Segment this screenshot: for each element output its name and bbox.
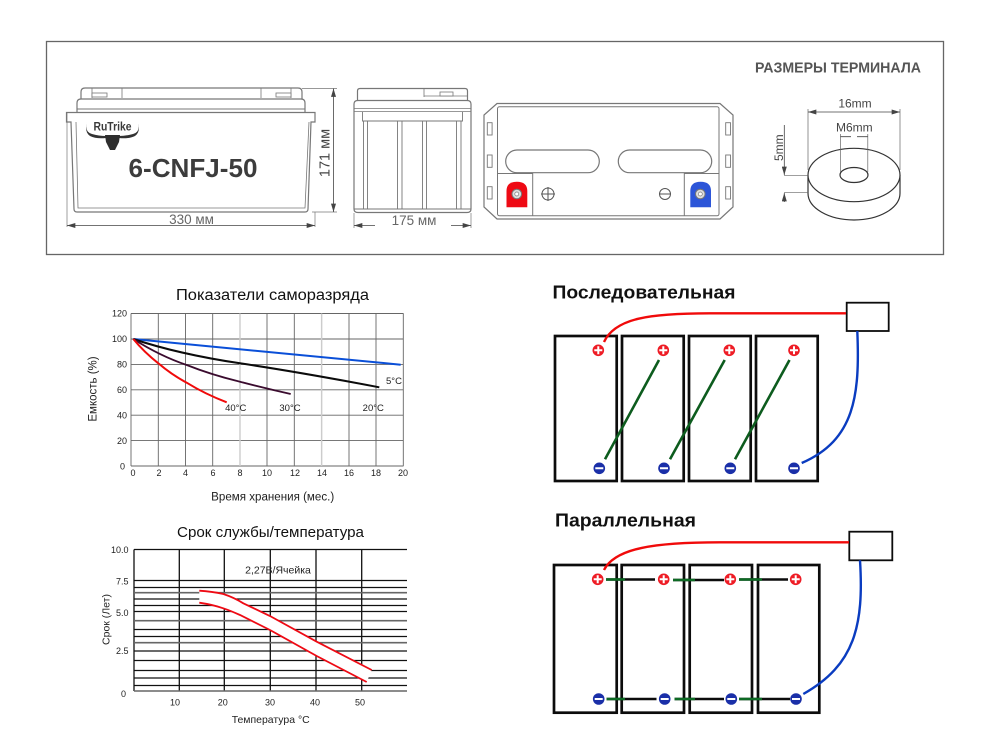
y axis ticks: 10.0: [111, 545, 128, 555]
x axis ticks: [170, 698, 365, 708]
terminal washer diagram: [772, 96, 900, 220]
x axis ticks: 12: [290, 468, 300, 478]
diagram: parallel connection: [554, 532, 892, 713]
heading: parallel connection: Параллельная: [555, 510, 696, 530]
y axis ticks: 20: [117, 436, 127, 446]
y axis ticks: 120: [112, 308, 127, 318]
curve: 40°C: [133, 339, 227, 402]
x axis ticks: 4: [183, 468, 188, 478]
blue wire: [802, 331, 858, 463]
curve labels: 5°C: [386, 376, 402, 387]
positive terminals: [592, 344, 800, 356]
curve labels: 20°C: [363, 403, 384, 414]
y axis ticks: 40: [117, 410, 127, 420]
label: M6mm: M6mm: [836, 120, 873, 134]
curve: 5°C: [133, 339, 401, 365]
y axis ticks: [111, 545, 128, 699]
plus symbol: [541, 187, 555, 201]
red wire: [604, 313, 846, 342]
171 mm dimension: [302, 88, 337, 212]
blue wire: [803, 560, 861, 694]
y axis ticks: 60: [117, 385, 127, 395]
y axis label: Срок (Лет): [100, 594, 112, 645]
minus symbol: [660, 188, 670, 200]
y axis ticks: 5.0: [116, 608, 128, 618]
jumper wires: [605, 360, 790, 459]
x axis ticks: 50: [355, 698, 365, 708]
x axis ticks: 16: [344, 468, 354, 478]
175 mm dimension: 175 мм: [392, 213, 436, 228]
title: self-discharge: Показатели саморазряда: [176, 287, 369, 304]
y axis ticks: [112, 308, 127, 472]
x axis ticks: 30: [265, 698, 275, 708]
curve note: 2,27В/Ячейка: [245, 564, 311, 576]
x axis ticks: 14: [317, 468, 327, 478]
chart: service life vs temperature: [100, 545, 407, 726]
x axis ticks: 10: [262, 468, 272, 478]
x axis ticks: 20: [398, 468, 408, 478]
logo: RuTrike bull: RuTrike: [94, 120, 132, 134]
y axis ticks: 0: [121, 689, 126, 699]
x axis ticks: 6: [210, 468, 216, 478]
x axis ticks: 18: [371, 468, 381, 478]
x axis ticks: 20: [218, 698, 228, 708]
charger box: [849, 532, 892, 560]
x axis ticks: 2: [156, 468, 162, 478]
y axis ticks: 0: [120, 462, 125, 472]
upper curve: [199, 591, 372, 670]
red wire: [604, 542, 849, 570]
front view of battery: [66, 88, 337, 227]
curve labels: [225, 376, 402, 414]
title: service life: Срок службы/температура: [177, 524, 365, 541]
x axis ticks: 8: [237, 468, 243, 478]
curve: 20°C: [133, 339, 379, 387]
positive terminals: [592, 574, 802, 585]
curve labels: 30°C: [279, 403, 301, 414]
logo: RuTrike bull: [86, 120, 139, 150]
chart: self-discharge: [88, 308, 408, 504]
y axis ticks: 80: [117, 360, 127, 370]
charger box: [847, 303, 889, 331]
battery cells: [554, 565, 819, 713]
battery cells: [555, 336, 818, 481]
x axis label: Температура °C: [232, 714, 310, 726]
top jumper wires: [606, 578, 788, 581]
white band between curves: [199, 591, 372, 682]
label: 16mm: 16mm: [838, 96, 872, 110]
heading: terminal dimensions: РАЗМЕРЫ ТЕРМИНАЛА: [755, 60, 922, 76]
negative terminal: [690, 182, 711, 207]
lower curve: [199, 603, 367, 682]
curve: 30°C: [133, 339, 291, 394]
negative terminals: [593, 693, 802, 705]
171 mm dimension: 171 мм: [318, 129, 334, 177]
330 mm dimension: [67, 113, 315, 227]
x axis ticks: [130, 468, 408, 478]
y axis ticks: 2.5: [116, 646, 128, 656]
diagram: series connection: [555, 303, 889, 481]
positive terminal: [506, 182, 527, 207]
heading: series connection: Последовательная: [552, 282, 736, 302]
bottom jumper wires: [606, 698, 790, 700]
y axis ticks: 7.5: [116, 576, 128, 586]
side view of battery: [354, 88, 471, 228]
top view of battery: [484, 104, 733, 219]
y axis label: Емкость (%): [88, 356, 100, 422]
330 mm dimension: 330 мм: [169, 212, 214, 227]
model name: 6-CNFJ-50: [128, 153, 258, 183]
curve labels: 40°C: [225, 403, 246, 414]
y axis ticks: 100: [112, 334, 127, 344]
negative terminals: [594, 462, 800, 474]
x axis ticks: 0: [130, 468, 136, 478]
x axis ticks: 40: [310, 698, 320, 708]
x axis label: Время хранения (мес.): [211, 492, 334, 504]
x axis ticks: 10: [170, 698, 180, 708]
panel: battery dimensions: [46, 42, 944, 254]
label: 5mm: 5mm: [772, 134, 786, 161]
